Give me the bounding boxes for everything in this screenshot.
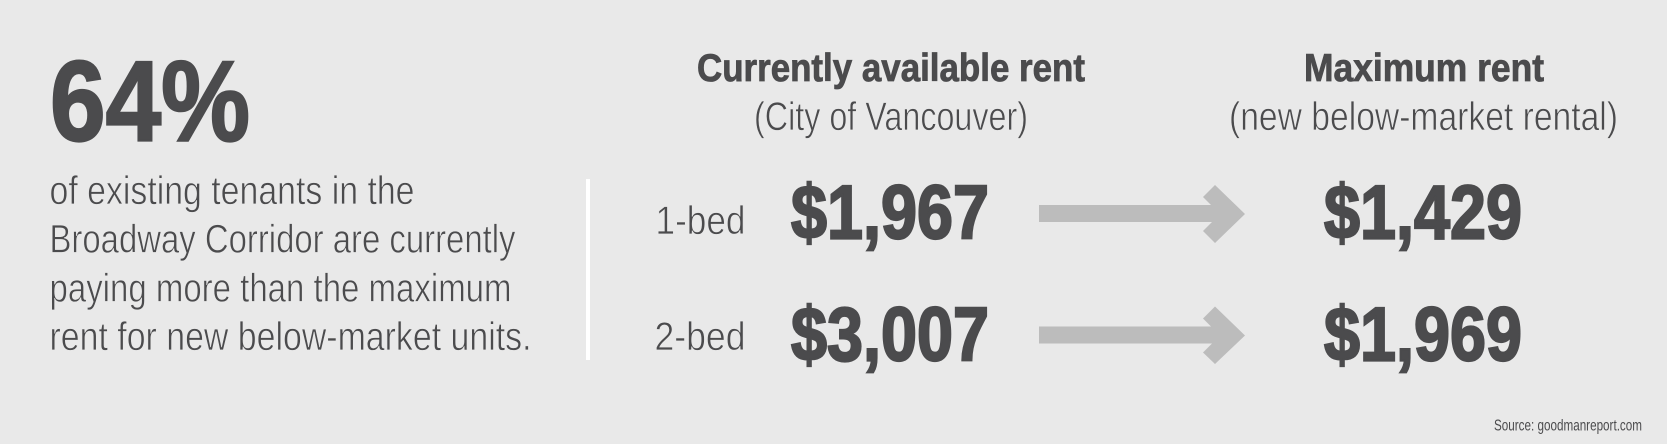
column heading: currently available rent: [697, 47, 1085, 139]
text block: statistic description: [50, 169, 532, 359]
arrow: [1039, 185, 1245, 243]
row label: 2-bed: 2-bed: [654, 315, 746, 359]
row: 1-bed: [656, 170, 1522, 256]
maximum rent: $1,429: $1,429: [1324, 170, 1522, 256]
big number: 64%: 64%: [50, 38, 250, 166]
arrow: [1039, 306, 1245, 364]
panel: headline statistic: [50, 38, 532, 359]
divider line: [586, 179, 590, 360]
column heading: maximum rent: [1229, 47, 1618, 139]
row label: 1-bed: 1-bed: [656, 199, 746, 243]
text block: statistic description: rent for new below-market units.: [50, 315, 532, 359]
current rent: $3,007: $3,007: [791, 292, 989, 378]
column heading: currently available rent: (City of Vancouver): [754, 95, 1028, 139]
maximum rent: $1,969: $1,969: [1324, 292, 1522, 378]
column heading: maximum rent: Maximum rent: [1304, 47, 1544, 90]
row: 2-bed: [654, 292, 1522, 378]
text block: statistic description: Broadway Corridor are currently: [50, 218, 516, 262]
text block: statistic description: of existing tenants in the: [50, 169, 414, 213]
text block: statistic description: paying more than the maximum: [50, 266, 512, 310]
column heading: currently available rent: Currently available rent: [697, 47, 1085, 90]
current rent: $1,967: $1,967: [791, 170, 989, 256]
